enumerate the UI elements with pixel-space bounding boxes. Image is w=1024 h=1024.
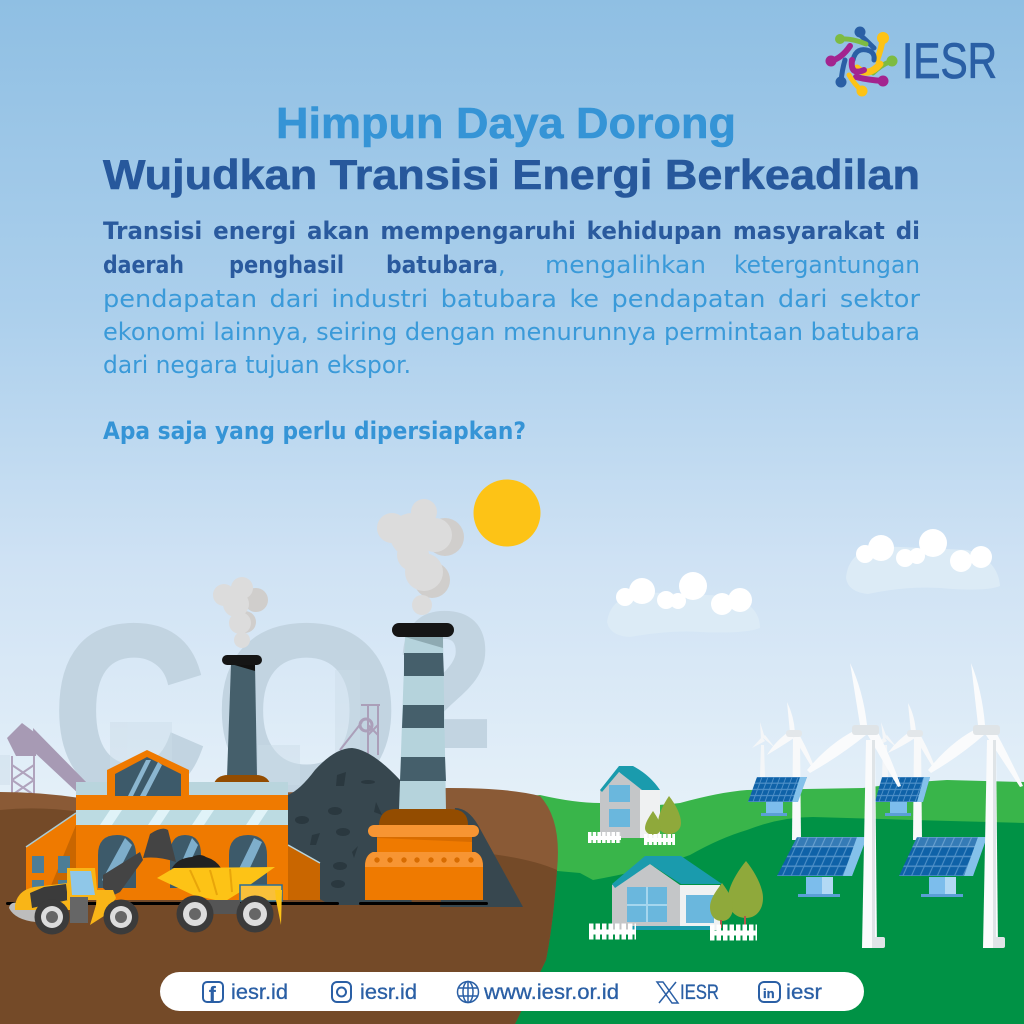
facebook: iesr.id [231,981,288,1004]
CO2 background lettering: 2 [400,578,490,784]
cloud right [846,529,1000,594]
factory small chimney [213,655,271,786]
CO2 background lettering [54,578,490,844]
medium wind turbines [767,702,934,840]
linkedin: in [763,986,775,1001]
X [657,981,719,1004]
logo: IESR [826,26,997,96]
solar panels far [748,777,930,816]
CO2 background lettering: C [54,578,204,844]
body paragraph: dari negara tujuan ekspor. [103,351,411,379]
body paragraph [103,217,920,379]
question heading: Apa saja yang perlu dipersiapkan? [103,417,526,445]
cloud left [607,572,760,637]
house large fences [589,932,757,933]
title: Wujudkan Transisi Energi Berkeadilan [103,151,920,198]
house large trees [710,861,763,928]
green hill back [490,780,1024,1024]
green hill front [490,817,1024,1024]
mine conveyor left [7,723,90,795]
factory building [26,750,320,900]
body paragraph: daerah [103,251,184,279]
tall chimney [392,623,454,810]
brown hill back [0,788,558,1024]
linkedin [759,981,822,1004]
logo: IESR: IESR [902,33,997,89]
body paragraph: Transisi energi akan mempengaruhi kehidupan masyarakat di [103,217,920,245]
body paragraph: mengalihkan [545,251,706,279]
dump truck [157,855,282,932]
ground lines [6,902,488,905]
house small fences [588,838,675,840]
smoke small [213,577,268,648]
facebook [203,981,288,1006]
instagram: iesr.id [360,981,417,1004]
small distant turbines [752,722,897,777]
house large [612,856,722,930]
linkedin: iesr [786,981,822,1004]
furnace base [365,809,483,900]
body paragraph: , [498,251,506,279]
brown ground front [0,808,557,1024]
body paragraph: batubara [386,251,498,279]
footer contact bar [160,972,864,1011]
mine headframe right [340,705,380,755]
house small trees [645,796,681,835]
instagram [332,981,417,1004]
title [103,99,920,198]
body paragraph: ekonomi lainnya, seiring dengan menurunnya permintaan batubara [103,318,920,346]
website: www.iesr.or.id [483,981,619,1004]
body paragraph: ketergantungan [734,251,920,279]
house small [600,766,660,838]
X: IESR [680,981,719,1004]
body paragraph: penghasil [229,251,344,279]
wheel loader [9,829,176,934]
sun [474,480,540,546]
large wind turbines [807,663,1023,948]
faded city background [0,670,360,785]
title: Himpun Daya Dorong [276,99,736,148]
solar panels near [777,837,987,897]
smoke large [377,499,464,615]
CO2 background lettering: O [216,578,397,844]
body paragraph: pendapatan dari industri batubara ke pendapatan dari sektor [103,285,920,313]
coal heap right [440,808,523,907]
facebook: f [209,984,216,1006]
coal heap main [288,748,412,905]
